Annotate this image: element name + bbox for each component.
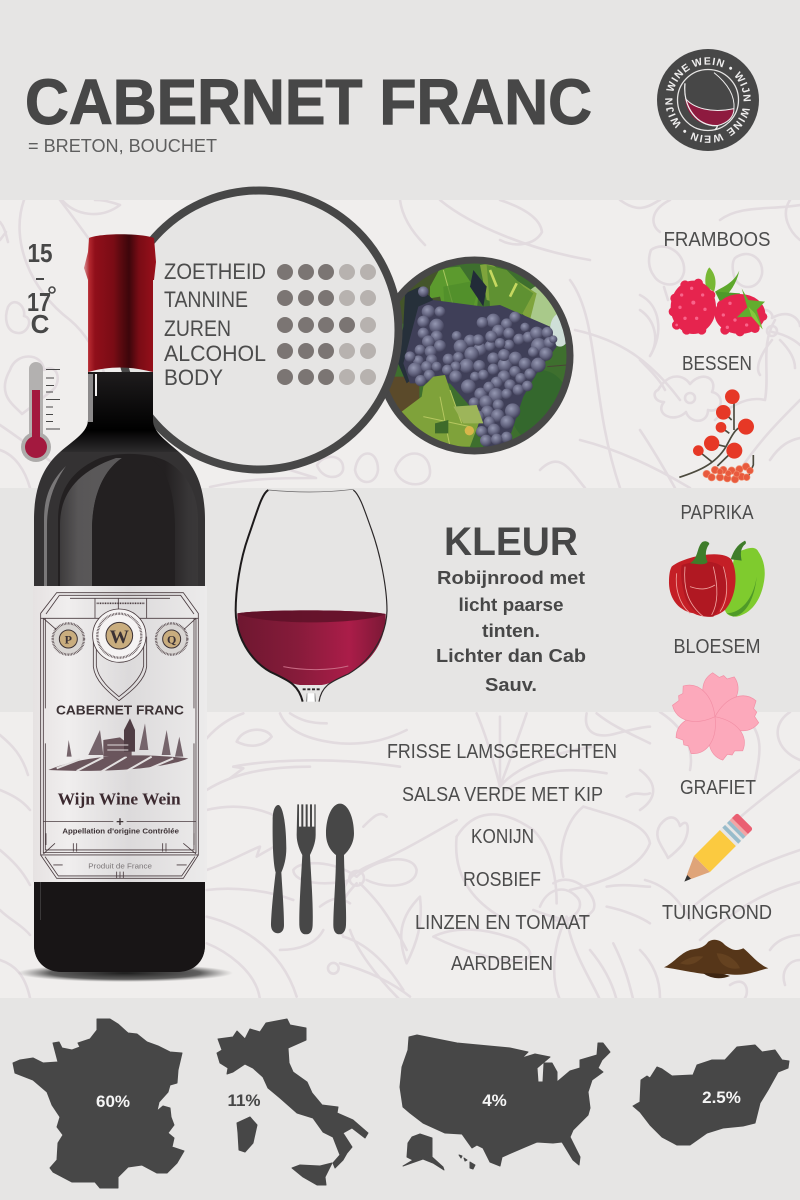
map: Italy 11%: 11% [227,1091,261,1110]
colour description: licht paarse [458,595,564,615]
bottle shadow [17,964,233,982]
bottle capsule [84,234,156,372]
photo: grape cluster [376,257,576,457]
food pairings: FRISSE LAMSGERECHTEN [387,741,617,763]
aroma: tuingrond: TUINGROND [662,902,772,924]
map: France 60%: 60% [96,1092,130,1111]
fork [297,804,316,934]
panel: bottom regions band [0,998,800,1200]
panel: upper floral band [0,200,800,488]
wine glass [236,489,387,702]
food pairings: SALSA VERDE MET KIP [402,784,603,806]
map: France 60% [13,1019,184,1188]
serving temperature: 15 [28,238,52,268]
label appellation: Appellation d'origine Contrôlée [62,828,179,835]
heading: kleur: KLEUR [444,520,578,564]
bottle label [33,586,207,882]
knife [271,805,286,933]
spoon [326,804,354,934]
aroma: framboos: FRAMBOOS [664,229,770,251]
aroma: bessen: BESSEN [682,353,752,375]
tasting labels: ZOETHEID [164,259,266,284]
icon: thermometer [21,362,60,462]
label medallion Q: Q [167,632,176,646]
label medallion W [93,609,146,662]
map: Italy 11% [217,1019,368,1185]
map: Hungary 2.5% [633,1045,789,1145]
label medallion P: P [65,632,72,646]
food pairings: ROSBIEF [463,869,541,891]
aroma: grafiet [676,777,756,890]
aroma: paprika [669,502,765,617]
colour description: Robijnrood met [437,568,585,588]
food pairings: KONIJN [471,826,534,848]
colour description [436,568,586,695]
tasting labels [164,259,266,390]
panel: middle colour band [0,488,800,712]
subtitle: synonyms: = BRETON, BOUCHET [28,136,217,156]
logo: wijn wine wein badge: WEIN • WIJN WINE WEIN • WIJN WINE [665,57,751,143]
food pairings [387,741,617,975]
aroma: tuingrond [662,902,772,978]
tasting labels: ZUREN [164,316,231,341]
panel: tasting profile circle [120,190,398,470]
colour description: Lichter dan Cab [436,646,586,666]
aroma: framboos [664,229,770,336]
title: CABERNET FRANC [25,66,592,138]
aroma: bessen [679,353,754,483]
aroma: bloesem [669,636,760,763]
glass outline [236,489,387,702]
label wine name: CABERNET FRANC [56,702,184,717]
tasting labels: TANNINE [164,287,248,312]
wine in glass [237,610,386,685]
label medallion Q [156,623,187,655]
aroma: grafiet: GRAFIET [680,777,756,799]
panel: lower floral band [0,712,800,1000]
food pairings: AARDBEIEN [451,953,553,975]
icon: cutlery [271,804,354,934]
label brand: Wijn Wine Wein [58,789,181,808]
serving temperature: 17 [27,287,51,317]
label medallion P [53,623,84,655]
label origin: Produit de France [88,862,152,871]
aroma: paprika: PAPRIKA [680,502,754,524]
serving temperature [27,238,55,339]
serving temperature: C [31,309,50,339]
colour description: tinten. [482,621,540,641]
aroma: bloesem: BLOESEM [674,636,760,658]
food pairings: LINZEN EN TOMAAT [415,912,590,934]
label medallion W: W [110,627,130,648]
tasting labels: ALCOHOL [164,341,266,366]
label chateau and vineyard sketch [48,718,188,772]
map: United States 4%: 4% [482,1091,507,1110]
map: United States 4% [400,1035,610,1170]
colour description: Sauv. [485,675,537,695]
bottle body [34,372,205,972]
tasting dot ratings [277,264,376,385]
map: Hungary 2.5%: 2.5% [702,1088,741,1107]
tasting labels: BODY [164,365,223,390]
wine bottle [17,234,233,982]
